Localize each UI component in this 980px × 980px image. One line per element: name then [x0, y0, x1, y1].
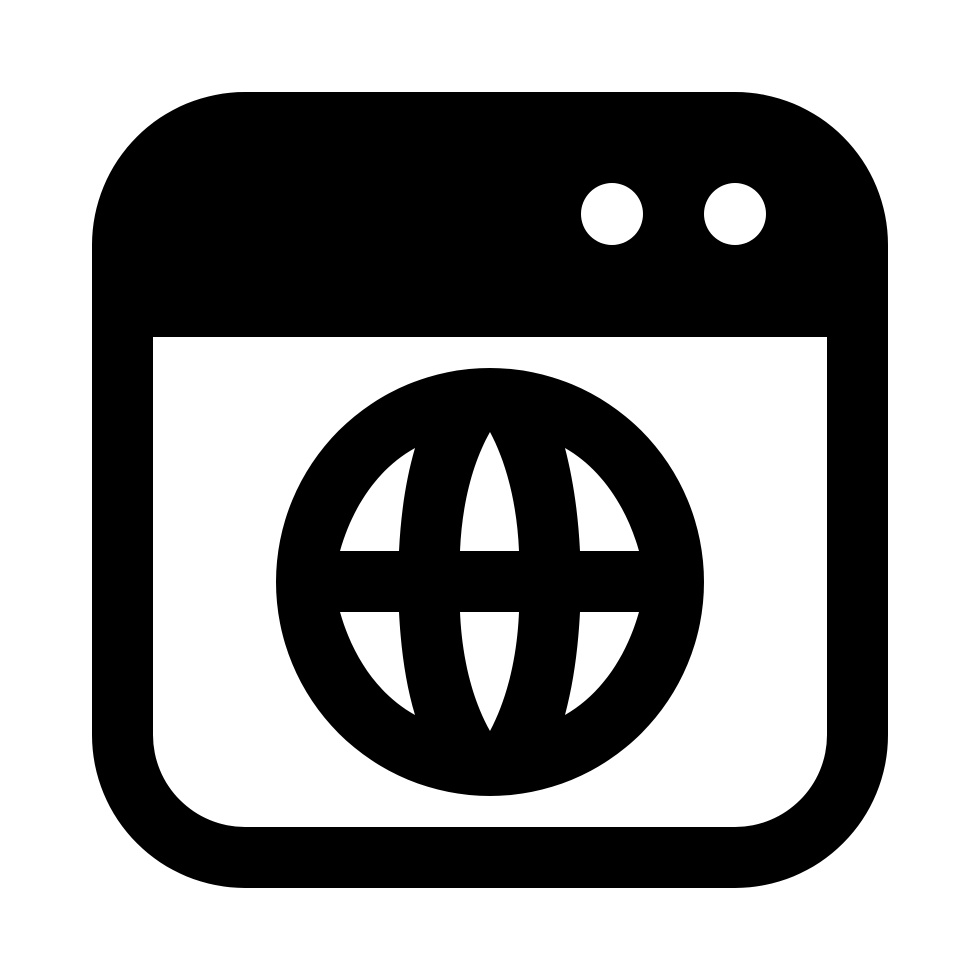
globe cut-outs [340, 432, 639, 731]
globe [276, 368, 704, 796]
window frame [92, 92, 888, 888]
window control dots [581, 183, 766, 245]
